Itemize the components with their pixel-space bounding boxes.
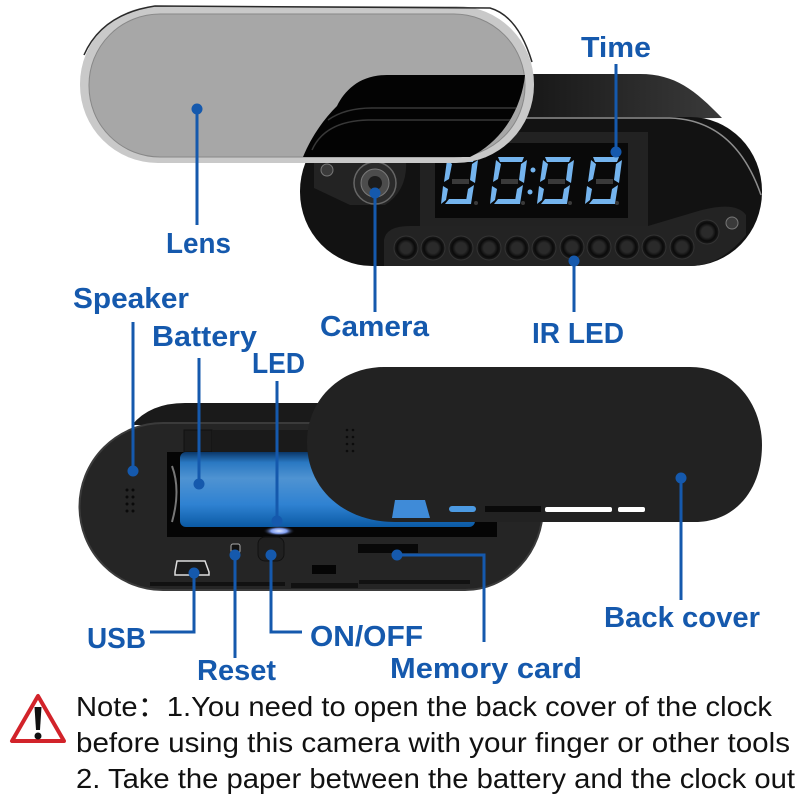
small vent — [312, 565, 336, 574]
cover holes — [346, 429, 354, 452]
clock seen through lens — [303, 75, 525, 157]
callout: lens: Lens — [166, 228, 231, 260]
callout: back cover: Back cover — [604, 602, 760, 634]
note text: before using this camera with your finger or other tools — [76, 727, 790, 758]
open clock back view — [80, 403, 543, 590]
callout: on/off — [266, 550, 423, 653]
callout: LED — [252, 348, 305, 526]
callout: USB — [87, 568, 200, 655]
back cover — [307, 367, 762, 522]
note text: 2. Take the paper between the battery and the clock out — [76, 763, 795, 794]
memory card slot — [358, 544, 418, 553]
callout: camera: Camera — [320, 311, 430, 343]
callout: battery — [152, 321, 257, 490]
callout: battery: Battery — [152, 321, 257, 353]
battery — [180, 452, 475, 527]
note text: Note：1.You need to open the back cover of the clock — [76, 691, 773, 722]
callout: USB: USB — [87, 623, 146, 655]
callout: on/off: ON/OFF — [310, 621, 423, 653]
mirror lens cover — [80, 6, 534, 163]
IR LED row — [394, 220, 719, 260]
callout: IR LED — [532, 256, 624, 350]
speaker holes — [126, 488, 134, 512]
screws — [321, 164, 738, 229]
time display panel — [435, 143, 628, 218]
USB port — [175, 561, 209, 575]
clock front face — [300, 117, 762, 266]
callout: reset — [197, 550, 276, 687]
note text — [76, 691, 795, 794]
battery spring — [172, 466, 176, 522]
display surround — [420, 132, 648, 226]
callout: memory card — [390, 550, 582, 685]
LED glow — [263, 526, 295, 536]
callout: LED: LED — [252, 348, 305, 380]
body — [80, 423, 543, 590]
back housing — [132, 403, 520, 425]
callout: camera — [320, 188, 430, 343]
callout: time: Time — [581, 32, 651, 64]
clock front view — [300, 74, 762, 266]
cover slots — [392, 500, 645, 518]
callout: speaker — [73, 283, 189, 476]
callout: lens — [166, 104, 231, 260]
callout: reset: Reset — [197, 655, 276, 687]
on/off switch — [258, 537, 284, 561]
callout: back cover — [604, 472, 760, 634]
battery bay — [167, 452, 497, 537]
unlit middle segments — [452, 179, 619, 205]
callout: memory card: Memory card — [390, 653, 582, 685]
reset button — [231, 544, 240, 553]
callout: IR LED: IR LED — [532, 318, 624, 350]
clock top housing — [318, 74, 722, 122]
camera lens — [354, 162, 396, 204]
digits 00:00 — [441, 157, 622, 204]
callout: time — [581, 32, 651, 158]
icon: warning triangle — [12, 696, 64, 741]
callout: speaker: Speaker — [73, 283, 189, 315]
